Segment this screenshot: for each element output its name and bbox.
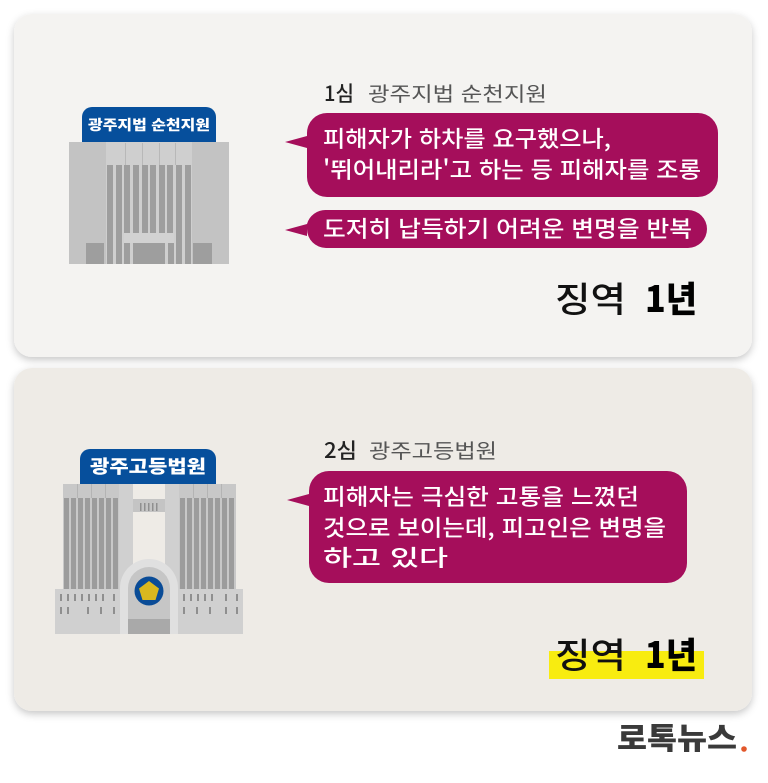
heading: second trial court	[324, 435, 497, 465]
heading: second trial court: 광주고등법원	[369, 440, 497, 463]
verdict: second trial with highlight: 1년	[645, 627, 697, 679]
speech bubble: ridicule	[285, 113, 718, 197]
speech bubble: appeal court reasoning: 것으로 보이는데, 피고인은 변명을	[323, 511, 666, 543]
heading: first trial court	[324, 78, 547, 108]
speech bubble: excuses	[285, 210, 707, 248]
icon: Suncheon branch court building	[69, 107, 229, 264]
speech bubble: ridicule: 피해자가 하차를 요구했으나,	[323, 122, 611, 154]
logo: Lotok News: 로톡뉴스	[617, 714, 737, 758]
speech bubble: excuses: 도저히 납득하기 어려운 변명을 반복	[323, 212, 692, 244]
speech bubble: appeal court reasoning	[287, 471, 687, 583]
panel: first trial	[14, 14, 752, 357]
verdict: second trial with highlight	[549, 627, 704, 679]
verdict: second trial with highlight: 징역	[555, 628, 626, 679]
verdict: first trial: 1년	[645, 271, 697, 323]
speech bubble: ridicule: '뛰어내리라'고 하는 등 피해자를 조롱	[323, 153, 701, 185]
verdict: first trial	[555, 271, 697, 323]
icon: Suncheon branch court building: 광주지법 순천지원	[88, 115, 210, 135]
icon: Gwangju High Court building	[55, 449, 243, 634]
speech bubble: appeal court reasoning: 피해자는 극심한 고통을 느꼈던	[323, 480, 639, 512]
heading: first trial court: 1심	[324, 78, 354, 108]
icon: Gwangju High Court building: 광주고등법원	[90, 453, 206, 479]
speech bubble: appeal court reasoning: 하고 있다	[323, 541, 448, 573]
heading: first trial court: 광주지법 순천지원	[368, 83, 547, 106]
panel: second trial	[14, 368, 752, 711]
verdict: first trial: 징역	[555, 272, 626, 323]
heading: second trial court: 2심	[324, 435, 357, 465]
